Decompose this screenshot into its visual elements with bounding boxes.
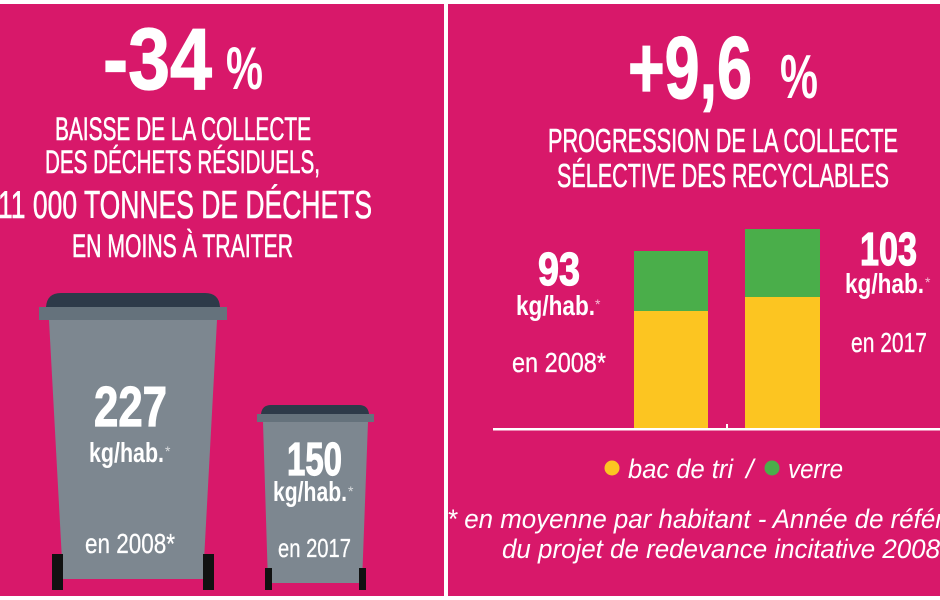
label: 150 kg/hab. en 2017: en 2017 [278,533,351,563]
headline: +9,6 %: % [780,43,818,112]
label: 227 kg/hab. en 2008 [85,375,175,559]
label: 93 kg/hab. en 2008: * [595,296,601,312]
label: 93 kg/hab. en 2008: 93 [538,243,580,295]
text block: recyclables description [548,122,898,194]
headline: -34 %: % [226,35,263,102]
icon: small bin 2017 [257,405,374,590]
legend: verre [788,454,843,484]
headline: +9,6 %: +9,6 [628,18,752,117]
text block: residual waste description: EN MOINS À TRAITER [72,228,293,264]
panel: recyclables [447,4,940,596]
label: 227 kg/hab. en 2008: * [165,443,171,459]
label: 103 kg/hab. en 2017: 103 [860,223,917,275]
footnote [447,504,940,564]
label: 227 kg/hab. en 2008: kg/hab. [89,437,164,468]
label: 150 kg/hab. en 2017: 150 [287,433,342,485]
label: 150 kg/hab. en 2017 [273,433,354,563]
panel: residual waste [0,4,444,596]
label: 150 kg/hab. en 2017: * [348,483,354,499]
legend: / [744,454,756,484]
bar: 2017 [745,229,820,428]
text block: residual waste description: DES DÉCHETS RÉSIDUELS, [45,144,320,180]
text block: residual waste description: BAISSE DE LA COLLECTE [55,111,311,147]
label: 227 kg/hab. en 2008: 227 [94,375,167,439]
label: 150 kg/hab. en 2017: kg/hab. [273,476,347,507]
text block: residual waste description: 11 000 TONNES DE DÉCHETS [0,184,372,227]
legend [604,454,843,484]
label: 227 kg/hab. en 2008: en 2008* [85,528,175,559]
legend: bac de tri [628,454,734,484]
bar chart: collection 2008 vs 2017 [493,229,940,430]
icon: large bin 2008 [39,293,227,590]
label: 93 kg/hab. en 2008 [512,243,606,378]
bar: 2008 [634,251,708,428]
label: 103 kg/hab. en 2017 [845,223,931,358]
text block: residual waste description [0,111,372,264]
headline: -34 %: -34 [103,11,212,108]
label: 103 kg/hab. en 2017: * [925,274,931,290]
label: 93 kg/hab. en 2008: en 2008* [512,347,606,378]
label: 93 kg/hab. en 2008: kg/hab. [516,290,595,321]
